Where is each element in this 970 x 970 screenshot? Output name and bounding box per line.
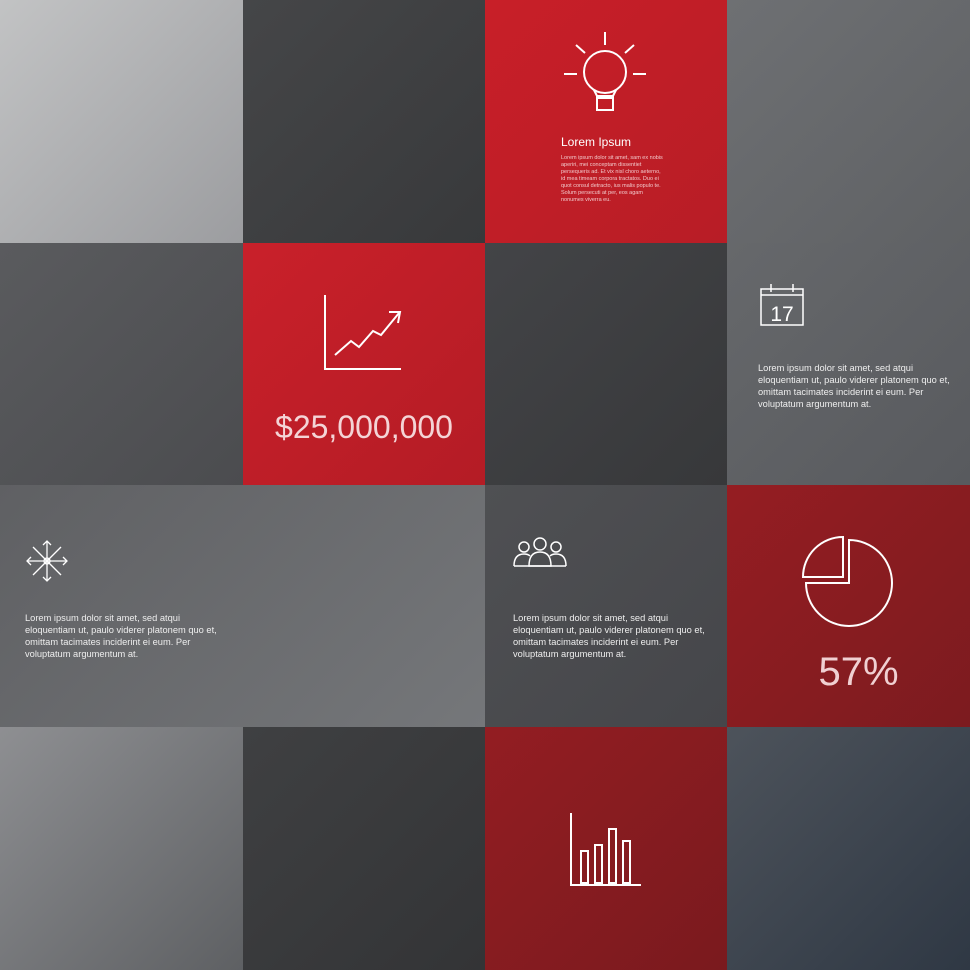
text: Lorem ipsum dolor sit amet, sed atqui eloquentiam ut, paulo viderer platonem quo et, omittam tacimates inciderint ei eum. Per voluptatum argumentum at. xyxy=(25,613,217,659)
panel: r3c1 xyxy=(243,727,485,970)
text: Lorem ipsum dolor sit amet, sam ex nobis aperiri, mei conceptam dissentiet persequeris ad. Et vix nisl choro aeterno, id mea timeam corpora tractatos. Duo ei quot consul detracto, ius malis populo te. Solum persecuti at per, eos agam nonumes viverra eu. xyxy=(561,155,663,203)
icon: lightbulb xyxy=(564,32,646,111)
panel: r3c0 xyxy=(0,727,243,970)
panel: r1c2 xyxy=(485,243,727,485)
icon: pie chart xyxy=(802,536,893,627)
icon: people xyxy=(513,537,567,567)
icon: calendar: 17 xyxy=(770,303,794,326)
text: Lorem ipsum dolor sit amet, sed atqui eloquentiam ut, paulo viderer platonem quo et, omittam tacimates inciderint ei eum. Per voluptatum argumentum at. xyxy=(758,363,950,409)
panel: r3c3 xyxy=(727,727,970,970)
panel: wide snowflake xyxy=(0,485,485,727)
icon: line chart xyxy=(324,295,402,370)
panel: pie xyxy=(727,485,970,727)
text: Lorem ipsum dolor sit amet, sed atqui eloquentiam ut, paulo viderer platonem quo et, omittam tacimates inciderint ei eum. Per voluptatum argumentum at. xyxy=(513,613,705,659)
panel: r0c0 xyxy=(0,0,243,243)
panel: growth chart xyxy=(243,243,485,485)
panel: bar chart xyxy=(485,727,727,970)
panel: r0c1 xyxy=(243,0,485,243)
heading: Lorem Ipsum xyxy=(561,135,631,149)
panel: team xyxy=(485,485,727,727)
icon: bar chart xyxy=(570,813,641,886)
panel: r1c0 xyxy=(0,243,243,485)
value: 57% xyxy=(818,650,899,694)
icon: calendar xyxy=(760,284,804,326)
icon: arrows star xyxy=(26,540,68,582)
value: $25,000,000 xyxy=(275,409,453,445)
panel: calendar xyxy=(727,243,970,485)
panel: lightbulb xyxy=(485,0,727,243)
panel: r0c3 xyxy=(727,0,970,243)
